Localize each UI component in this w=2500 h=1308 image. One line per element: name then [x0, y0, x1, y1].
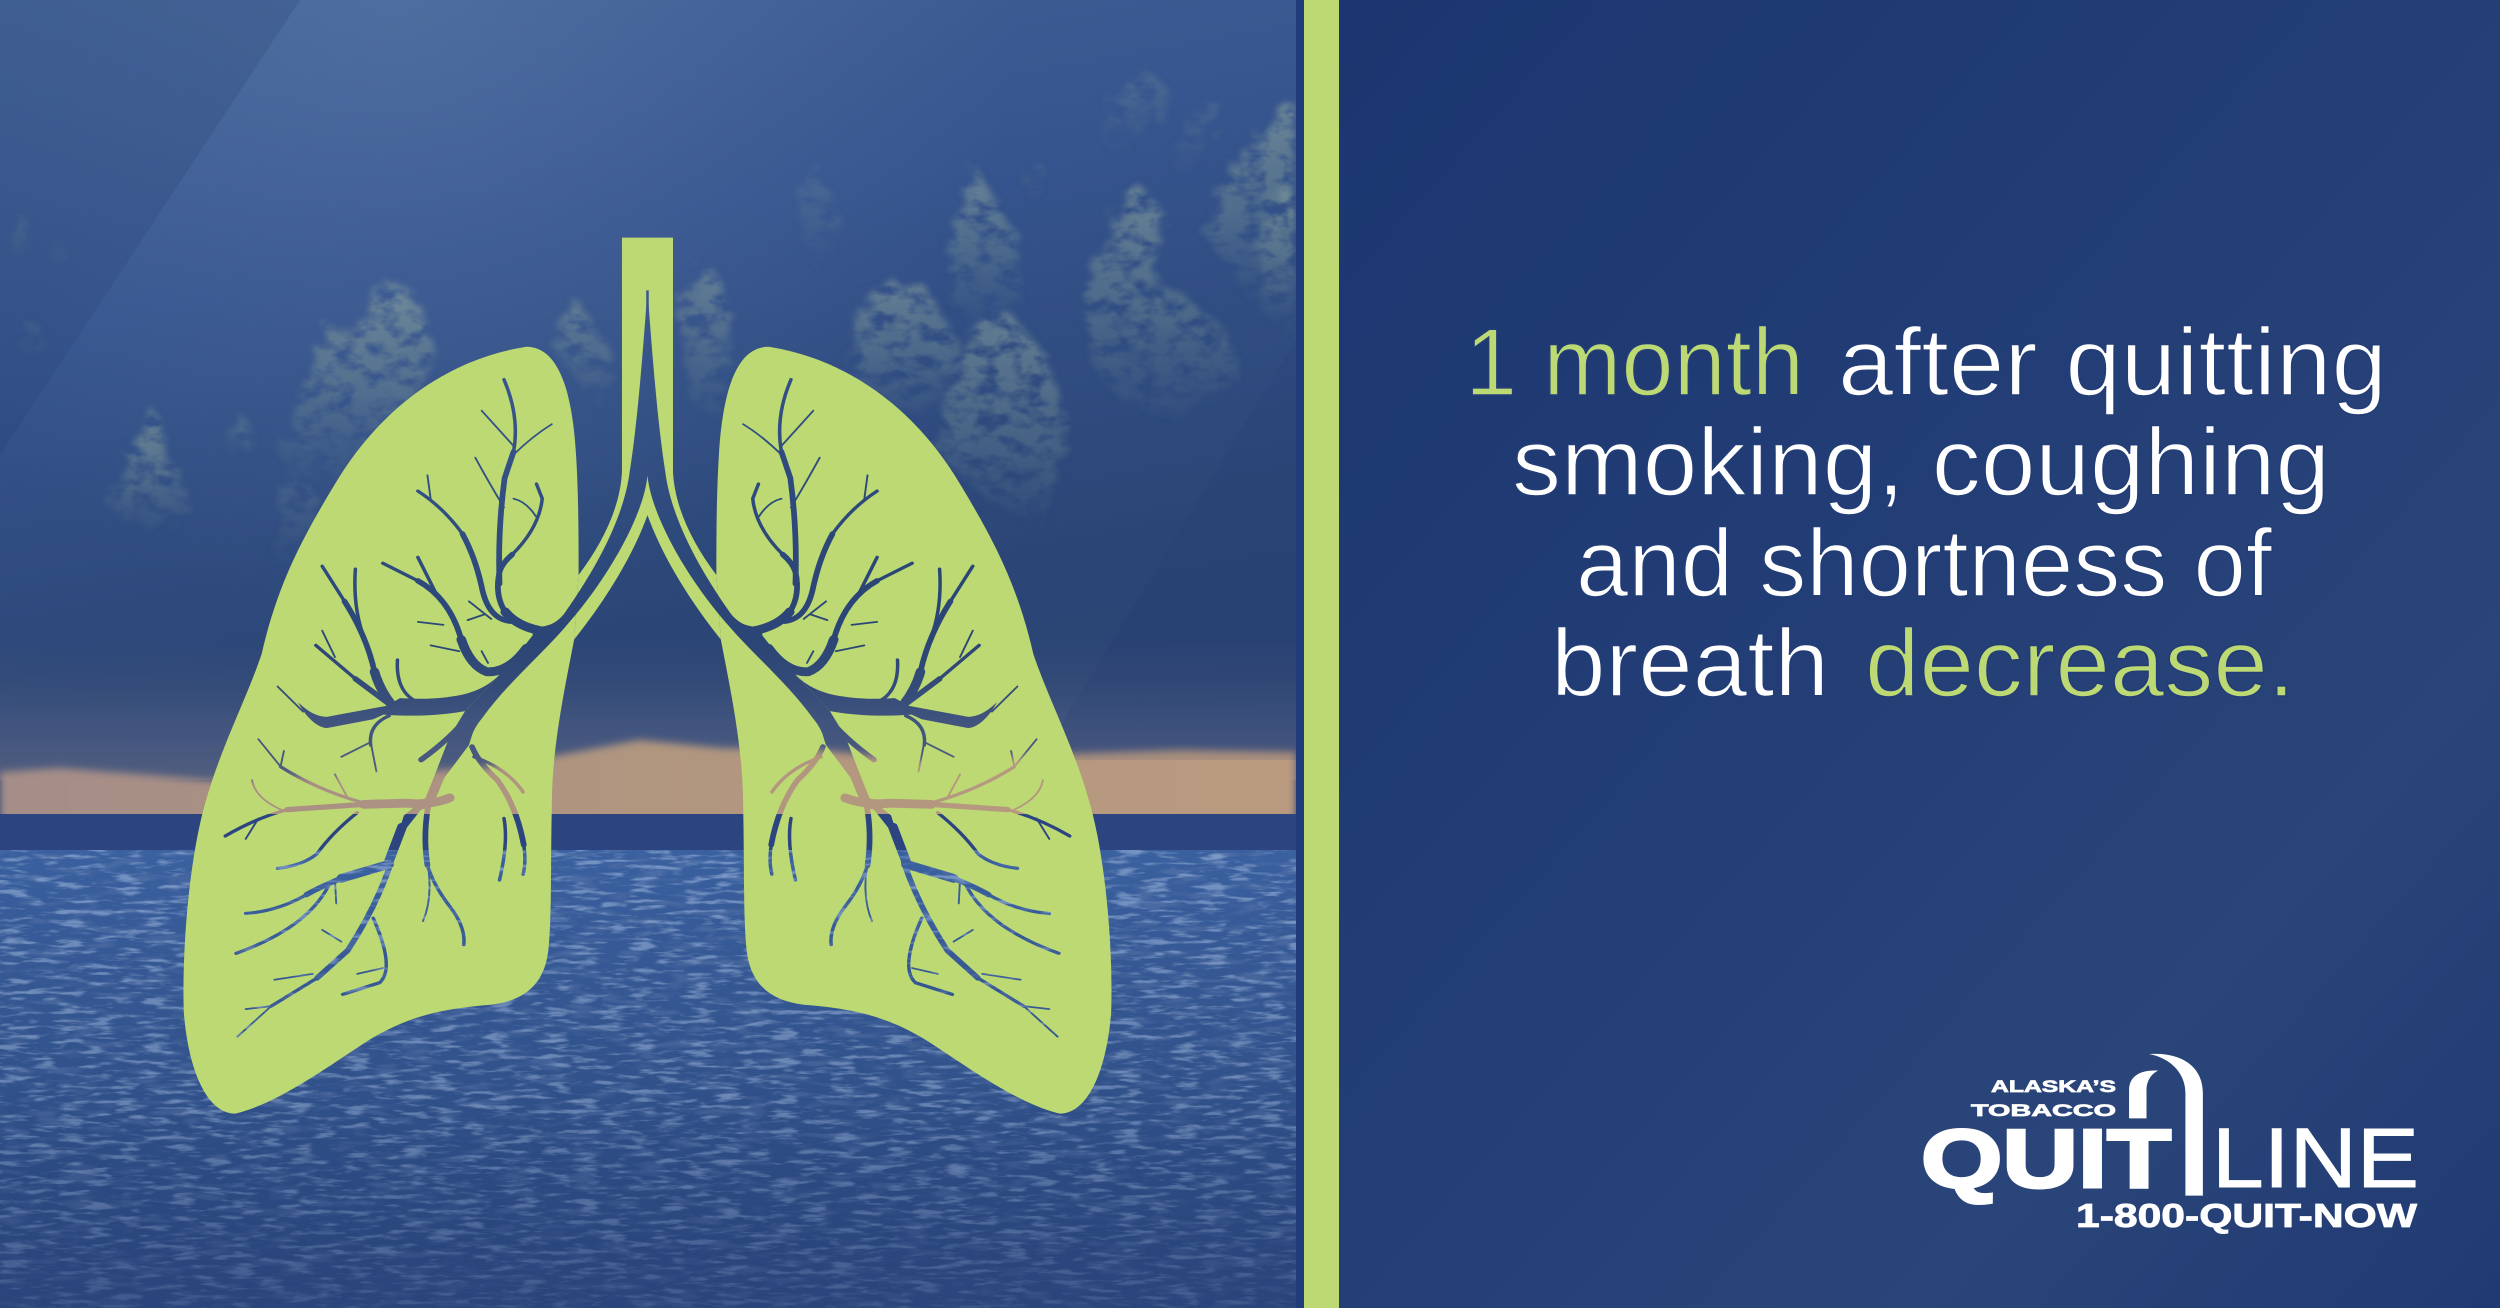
logo: Alaska's Tobacco [1971, 1077, 2116, 1120]
logo: LINE: LINE [2212, 1111, 2419, 1205]
headline message: breath [1551, 610, 1829, 717]
diagonal light streak: top left [0, 0, 300, 455]
logo: Alaska's Tobacco: ALASKA’S [1991, 1077, 2116, 1096]
forest tree silhouettes [8, 70, 1296, 560]
dark distant water band [0, 814, 1296, 856]
logo: arch mark [2129, 1054, 2203, 1196]
lungs and trachea icon [183, 238, 1111, 1114]
sandy shoreline [0, 740, 1296, 830]
panel: lake and forest photo background [0, 0, 1296, 1308]
narrow navy sliver beside photo [1296, 0, 1304, 1308]
headline message: and shortness of [1576, 510, 2272, 617]
Alaska's Tobacco Quitline logo [1921, 1054, 2419, 1234]
logo: phone number: 1-800-QUIT-NOW [2076, 1197, 2418, 1234]
headline message: decrease. [1865, 610, 2295, 717]
headline message: smoking, coughing [1512, 409, 2330, 516]
lake water with ripples [0, 850, 1296, 1308]
logo: QUIT: QUIT [1921, 1112, 2171, 1205]
headline message [1465, 309, 2387, 717]
shore haze above sand [0, 640, 1296, 780]
headline message: 1 month [1465, 309, 1804, 416]
green vertical divider [1304, 0, 1339, 1308]
panel: navy message background [1339, 0, 2500, 1308]
logo: Alaska's Tobacco: TOBACCO [1971, 1101, 2116, 1120]
headline message: after quitting [1838, 309, 2387, 416]
diagonal shade: lower right [1040, 340, 1296, 760]
